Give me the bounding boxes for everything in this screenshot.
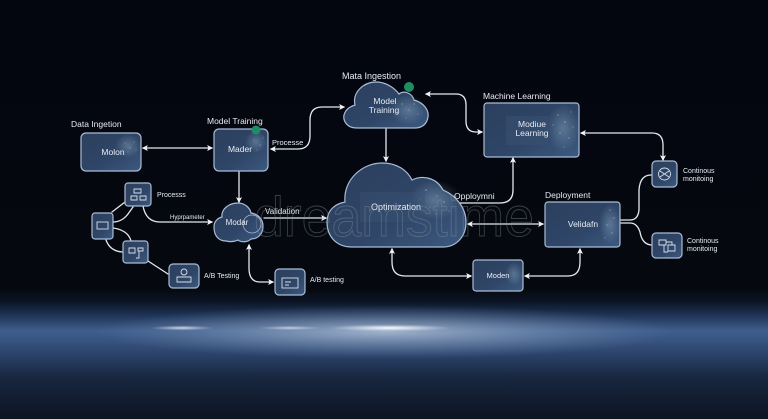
- icon node: hub: [92, 213, 113, 239]
- label: Hyperparameter: Hyprpameter: [170, 215, 205, 221]
- panel: Model Training box: [207, 116, 268, 171]
- label: A/B testing right: A/B testing: [310, 277, 344, 284]
- icon node: continuous monitoring top: [652, 161, 677, 187]
- cloud: Model Training top: [342, 71, 428, 128]
- connector arrows: [106, 94, 663, 282]
- heading: Deployment: [545, 190, 591, 200]
- cloud: Optimization: [327, 163, 466, 247]
- icon node: process: [125, 183, 151, 206]
- cloud: Model Training top: Model: [373, 96, 397, 106]
- cloud: Modar: Modar: [226, 218, 249, 227]
- panel: Moden: [473, 260, 523, 291]
- label: Continuous monitoring top: Continous: [683, 168, 715, 175]
- heading: Model Training: [207, 116, 263, 126]
- cloud: Optimization: Optimization: [371, 202, 421, 212]
- label: A/B Testing: A/B Testing: [204, 273, 239, 280]
- panel: Deployment: Velidafn: [568, 219, 598, 229]
- heading: Mata Ingestion: [342, 71, 401, 81]
- panel: Machine Learning: Modiue: [518, 119, 546, 129]
- panel: Data Ingestion: Molon: [101, 147, 125, 157]
- heading: Machine Learning: [483, 91, 551, 101]
- heading: Data Ingetion: [71, 119, 122, 129]
- cloud: Model Training top: Training: [369, 105, 399, 115]
- label: Processes: Processe: [272, 138, 303, 147]
- panel: Deployment: [545, 190, 621, 247]
- label: Deployment arrow: Opploymni: [454, 191, 495, 201]
- label: Continuous monitoring bottom: Continous: [687, 238, 719, 245]
- panel: Model Training box: Mader: [228, 144, 252, 154]
- label: Process: Processs: [157, 192, 186, 199]
- icon node: A/B testing person: [169, 264, 199, 288]
- icon node: A/B testing card: [275, 269, 305, 295]
- label: Continuous monitoring bottom: monitoing: [687, 246, 717, 253]
- panel: Data Ingestion: [71, 119, 141, 171]
- label: Continuous monitoring top: monitoing: [683, 176, 713, 183]
- cloud: Modar: [214, 203, 263, 242]
- icon node: schema: [123, 241, 148, 263]
- panel: Machine Learning: Learning: [515, 128, 549, 138]
- label: Validation: Validation: [265, 207, 300, 216]
- panel: Machine Learning: [483, 91, 580, 157]
- icon node: continuous monitoring bottom: [652, 233, 682, 258]
- watermark: dreamstime: [254, 185, 534, 248]
- panel: Moden: Moden: [487, 271, 509, 280]
